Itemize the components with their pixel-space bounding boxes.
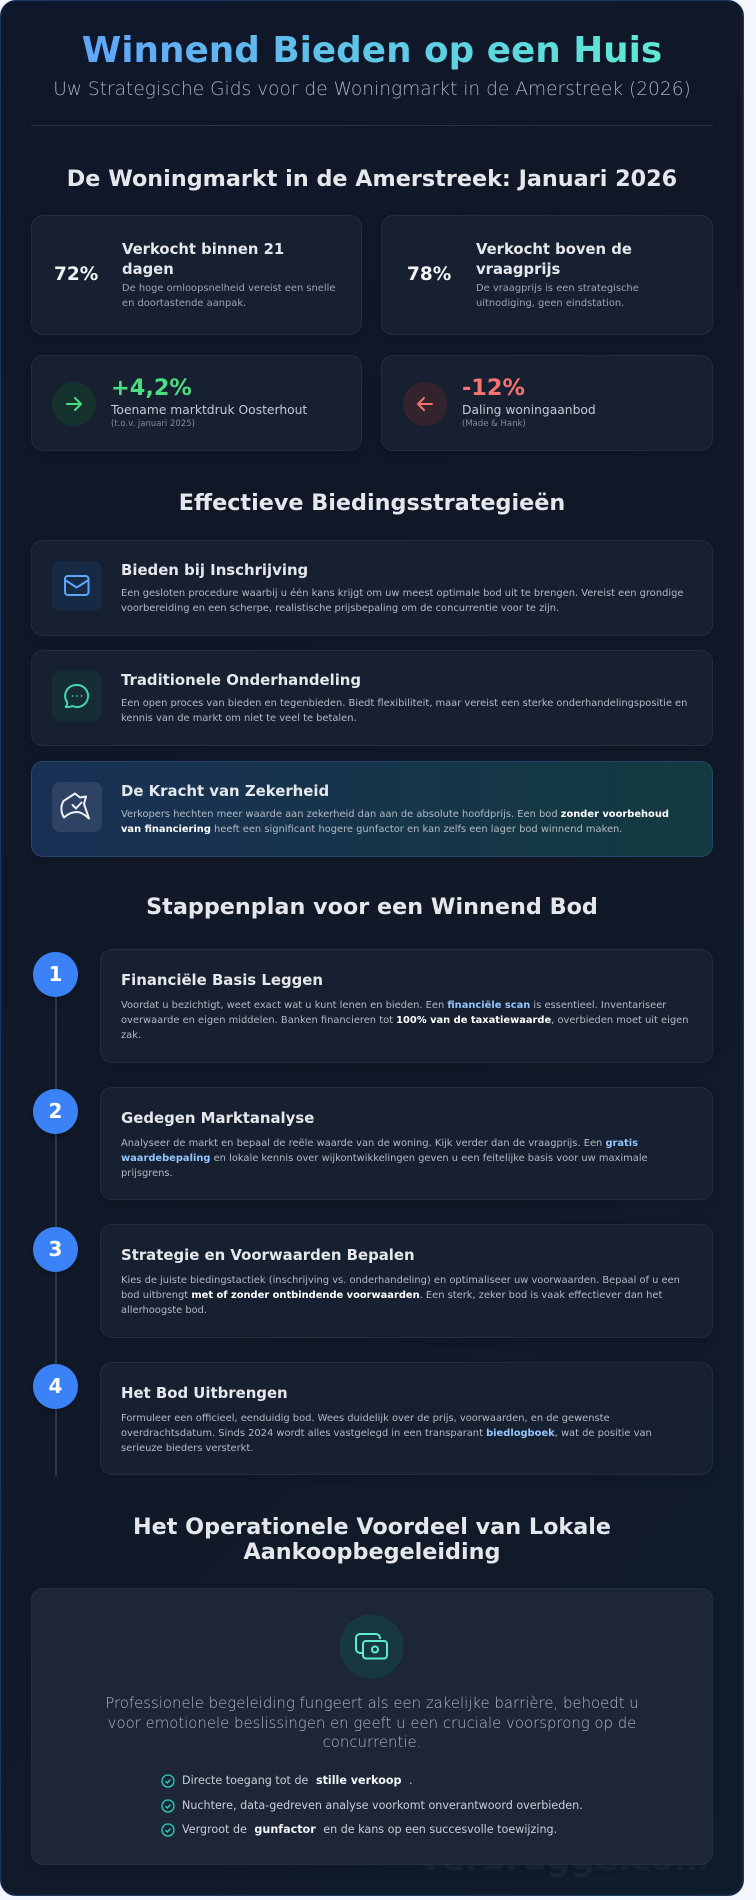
step text: zak. bbox=[121, 1030, 141, 1041]
benefit 1: Directe toegang tot de stille verkoop . bbox=[182, 1774, 413, 1787]
icon: envelope bbox=[52, 561, 102, 610]
step text: waardebepaling en lokale kennis over wijkontwikkelingen geven u een feitelijke basis voor uw maximale bbox=[121, 1153, 648, 1164]
strategy text bbox=[121, 588, 683, 614]
heading: strategies: Effectieve Biedingsstrategieën bbox=[179, 490, 565, 516]
step 3 number bbox=[33, 1227, 78, 1272]
stat description: De hoge omloopsnelheid vereist een snelle bbox=[122, 283, 335, 294]
stat card: 78% bbox=[381, 215, 713, 335]
trend card: market pressure bbox=[31, 355, 362, 451]
icon: chat bubble bbox=[52, 671, 102, 720]
step text: overwaarde en eigen middelen. Banken financieren tot 100% van de taxatiewaarde, overbieden moet uit eigen bbox=[121, 1015, 688, 1026]
icon: money bbox=[340, 1614, 404, 1678]
strategy title: Bieden bij Inschrijving bbox=[121, 561, 308, 579]
subtitle: Uw Strategische Gids voor de Woningmarkt in de Amerstreek (2026) bbox=[53, 79, 691, 100]
step text bbox=[121, 1413, 652, 1454]
strategy text: Verkopers hechten meer waarde aan zekerheid dan aan de absolute hoofdprijs. Een bod zonder voorbehoud bbox=[121, 809, 669, 820]
stat title: vraagprijs bbox=[476, 261, 560, 278]
strategy text: voorbereiding en een scherpe, realistische prijsbepaling om de concurrentie voor te zijn. bbox=[121, 603, 559, 614]
stat value: 72% bbox=[54, 264, 98, 285]
step text: Voordat u bezichtigt, weet exact wat u kunt lenen en bieden. Een financiële scan is essentieel. Inventariseer bbox=[121, 1000, 666, 1011]
callout text: concurrentie. bbox=[323, 1733, 421, 1751]
strategy text: Een open proces van bieden en tegenbieden. Biedt flexibiliteit, maar vereist een sterke onderhandelingspositie en bbox=[121, 698, 687, 709]
benefit 1 icon bbox=[161, 1774, 175, 1788]
benefit 3 icon bbox=[161, 1823, 175, 1837]
strategy text: Een gesloten procedure waarbij u één kans krijgt om uw meest optimale bod uit te brengen. Vereist een grondige bbox=[121, 588, 683, 599]
heading: local advantage: Het Operationele Voordeel van Lokale bbox=[133, 1514, 611, 1540]
strategy card: zekerheid (highlight) bbox=[31, 761, 713, 857]
step 3 number: 3 bbox=[49, 1237, 62, 1261]
callout text: voor emotionele beslissingen en geeft u een cruciale voorsprong op de bbox=[108, 1714, 636, 1732]
heading: market: De Woningmarkt in de Amerstreek: Januari 2026 bbox=[67, 166, 677, 192]
stat title: Verkocht binnen 21 bbox=[122, 241, 284, 258]
strategy text bbox=[121, 698, 687, 724]
stat description bbox=[476, 283, 639, 309]
watermark: verbrugge.com bbox=[420, 1839, 709, 1878]
callout text bbox=[105, 1694, 639, 1751]
stat card: 72% bbox=[31, 215, 362, 335]
step text bbox=[121, 1275, 680, 1316]
step 1 number: 1 bbox=[49, 962, 62, 986]
stat description: uitnodiging, geen eindstation. bbox=[476, 298, 624, 309]
trend card: supply bbox=[381, 355, 713, 451]
stat title: Verkocht boven de bbox=[476, 241, 632, 258]
strategy card: onderhandeling bbox=[31, 650, 713, 746]
step text: bod uitbrengt met of zonder ontbindende voorwaarden. Een sterk, zeker bod is vaak effectiever dan het bbox=[121, 1290, 662, 1301]
heading: local advantage: Aankoopbegeleiding bbox=[243, 1539, 500, 1565]
step text: Kies de juiste biedingstactiek (inschrijving vs. onderhandeling) en optimaliseer uw voorwaarden. Bepaal of u een bbox=[121, 1275, 680, 1286]
step 4 card bbox=[100, 1362, 713, 1475]
stat title bbox=[476, 241, 632, 278]
callout text: Professionele begeleiding fungeert als een zakelijke barrière, behoedt u bbox=[105, 1694, 639, 1712]
header bbox=[53, 30, 691, 100]
step text bbox=[121, 1000, 688, 1041]
step text bbox=[121, 1138, 648, 1179]
step text: Formuleer een officieel, eenduidig bod. Wees duidelijk over de prijs, voorwaarden, en de gewenste bbox=[121, 1413, 610, 1424]
trend value: +4,2% bbox=[111, 375, 192, 401]
step 2 card bbox=[100, 1087, 713, 1200]
step title: Financiële Basis Leggen bbox=[121, 971, 323, 989]
stat description: en doortastende aanpak. bbox=[122, 298, 246, 309]
trend note: (Made & Hank) bbox=[462, 419, 526, 429]
trend note: (t.o.v. januari 2025) bbox=[111, 419, 195, 429]
step 2 number bbox=[33, 1089, 78, 1134]
step 4 number bbox=[33, 1364, 78, 1409]
step 1 card bbox=[100, 949, 713, 1063]
stat title: dagen bbox=[122, 261, 174, 278]
timeline line bbox=[55, 995, 57, 1476]
callout panel bbox=[31, 1588, 713, 1865]
strategy text: van financiering heeft een significant hogere gunfactor en kan zelfs een lager bod winnend maken. bbox=[121, 824, 622, 835]
benefit 2: Nuchtere, data-gedreven analyse voorkomt onverantwoord overbieden. bbox=[182, 1799, 583, 1812]
icon: badge check bbox=[52, 782, 102, 832]
step 2 number: 2 bbox=[49, 1099, 62, 1123]
step 3 card bbox=[100, 1224, 713, 1338]
step text: Analyseer de markt en bepaal de reële waarde van de woning. Kijk verder dan de vraagprijs. Een gratis bbox=[121, 1138, 638, 1149]
stat value: 78% bbox=[407, 264, 451, 285]
stat title bbox=[122, 241, 284, 278]
strategy title: Traditionele Onderhandeling bbox=[121, 671, 361, 689]
stat description: De vraagprijs is een strategische bbox=[476, 283, 639, 294]
step text: allerhoogste bod. bbox=[121, 1305, 207, 1316]
step title: Gedegen Marktanalyse bbox=[121, 1109, 314, 1127]
step text: serieuze bieders versterkt. bbox=[121, 1443, 253, 1454]
step title: Het Bod Uitbrengen bbox=[121, 1384, 288, 1402]
step 4 number: 4 bbox=[49, 1374, 62, 1398]
benefit 3: Vergroot de gunfactor en de kans op een succesvolle toewijzing. bbox=[182, 1823, 557, 1836]
strategy text: kennis van de markt om niet te veel te betalen. bbox=[121, 713, 357, 724]
heading: step plan: Stappenplan voor een Winnend Bod bbox=[146, 894, 598, 920]
title: Winnend Bieden op een Huis bbox=[82, 30, 662, 71]
strategy card: inschrijving bbox=[31, 540, 713, 636]
benefit 2 icon bbox=[161, 1799, 175, 1813]
trend label: Daling woningaanbod bbox=[462, 403, 596, 417]
icon: arrow right bbox=[52, 382, 96, 426]
trend value: -12% bbox=[462, 375, 525, 401]
step title: Strategie en Voorwaarden Bepalen bbox=[121, 1246, 415, 1264]
stat description bbox=[122, 283, 335, 309]
trend label: Toename marktdruk Oosterhout bbox=[111, 403, 307, 417]
timeline bbox=[33, 949, 713, 1476]
step text: overdrachtsdatum. Sinds 2024 wordt alles vastgelegd in een transparant biedlogboek, wat de positie van bbox=[121, 1428, 652, 1439]
step text: prijsgrens. bbox=[121, 1168, 173, 1179]
heading: local advantage bbox=[133, 1514, 611, 1565]
icon: arrow left bbox=[403, 382, 447, 426]
step 1 number bbox=[33, 952, 78, 997]
strategy text bbox=[121, 809, 669, 835]
strategy title: De Kracht van Zekerheid bbox=[121, 782, 329, 800]
